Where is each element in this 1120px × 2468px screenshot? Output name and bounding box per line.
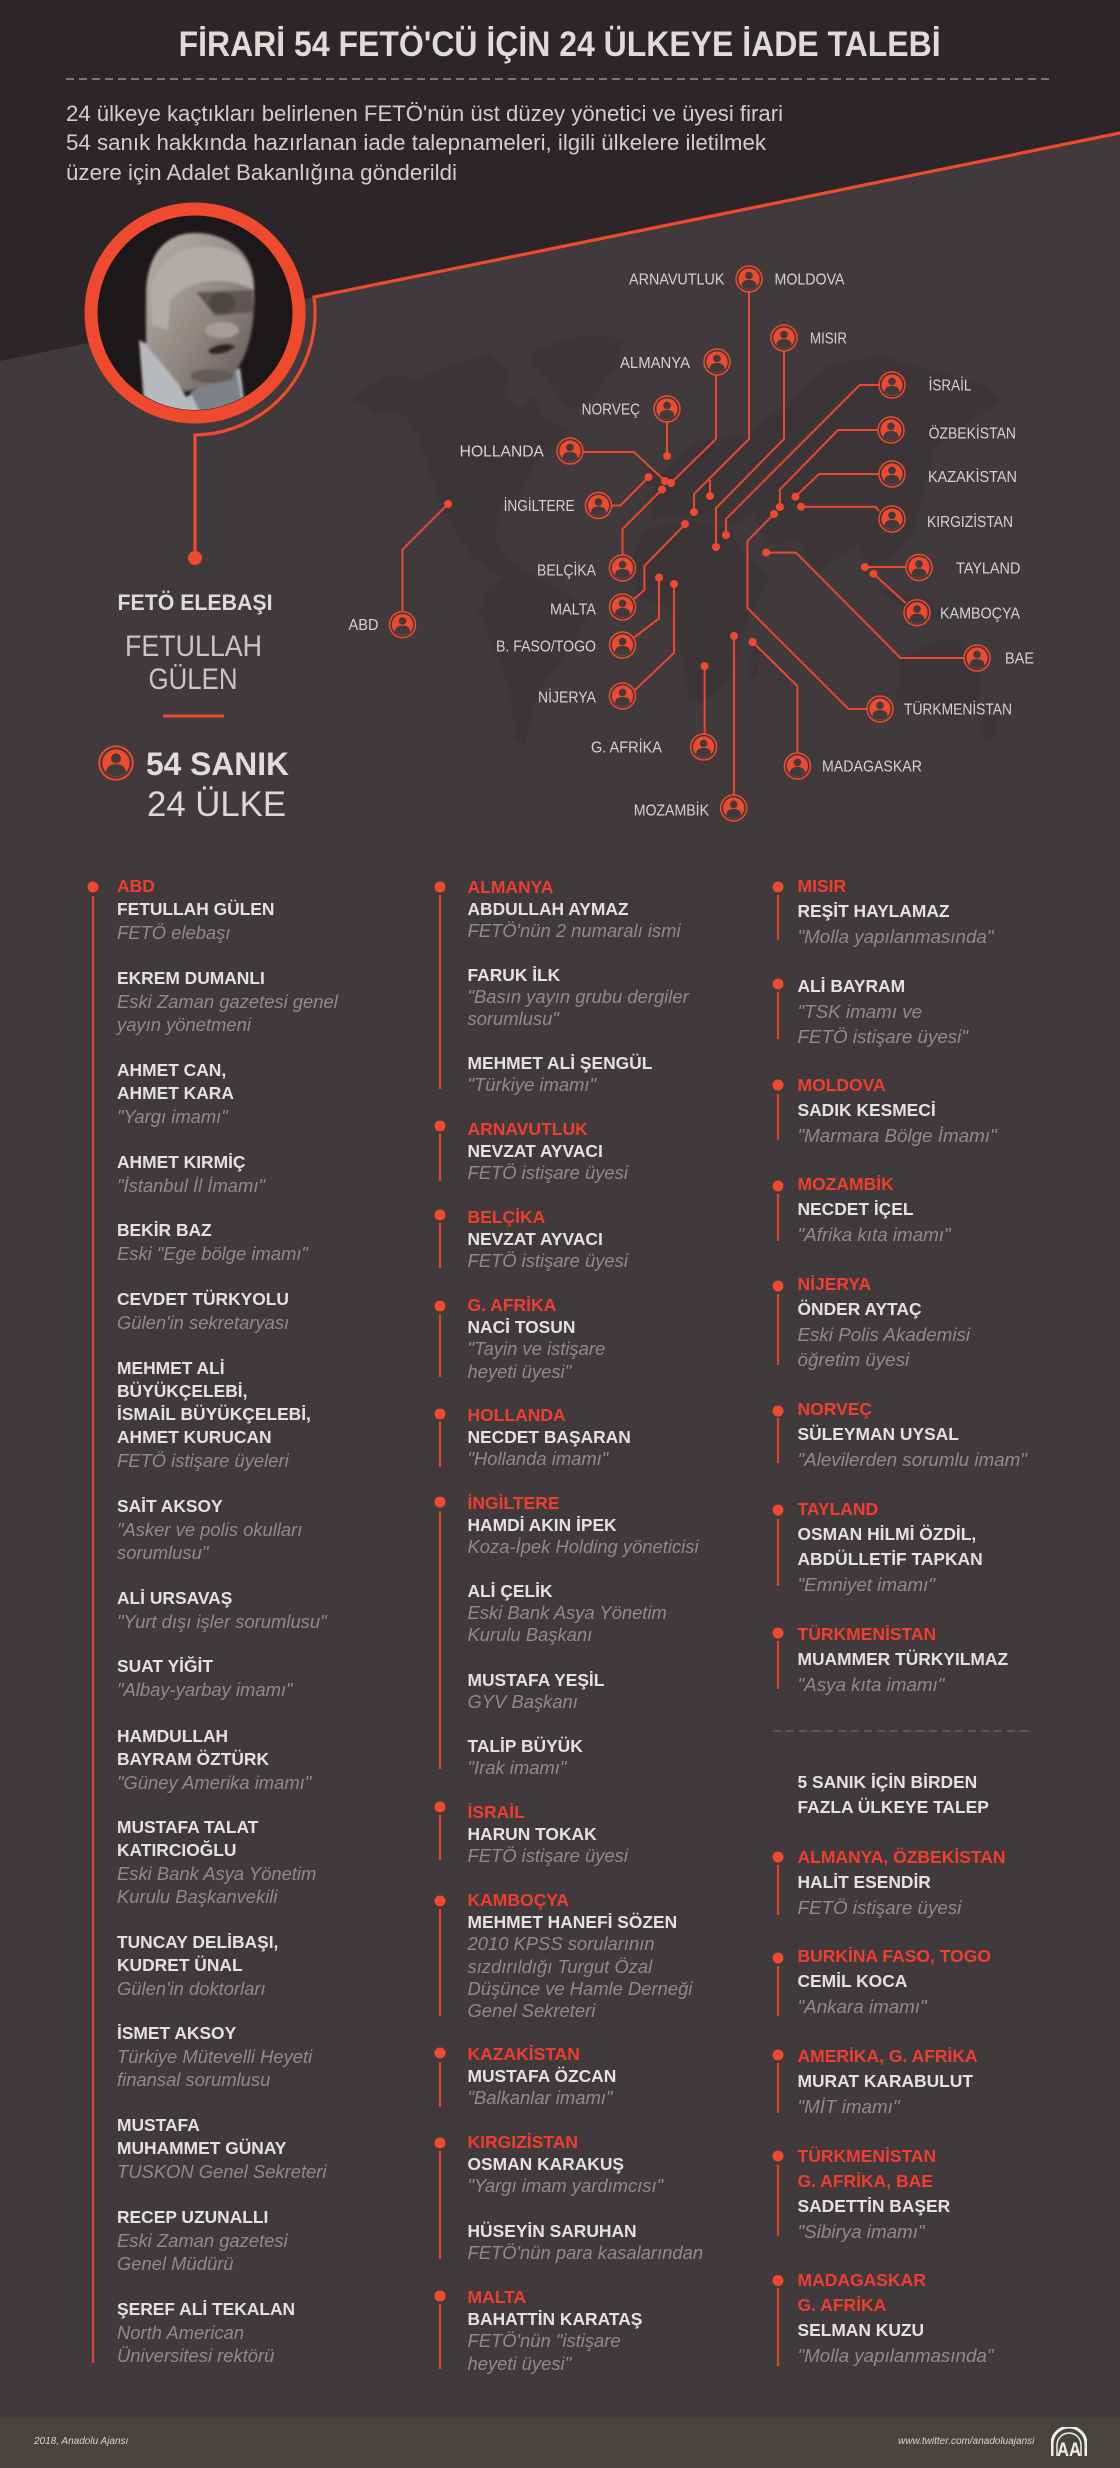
entry: Mehmet Ali Şengül: "Türkiye imamı"	[468, 1074, 596, 1095]
marker: Arnavutluk / Moldova	[629, 266, 845, 292]
entry: Recep Uzunallı	[117, 2206, 288, 2274]
footer bar	[0, 2418, 1120, 2468]
marker: Özbekistan: ÖZBEKİSTAN	[929, 424, 1016, 442]
text block: FETÖ leader: FETÖ ELEBAŞI	[118, 590, 272, 615]
entry: Türkmenistan, G. Afrika, BAE: TÜRKMENİSTAN	[798, 2146, 936, 2166]
entry: Madagaskar, G. Afrika	[798, 2268, 994, 2368]
entry: Mısır: MISIR	[798, 876, 846, 896]
entry: Nijerya: Eski Polis Akademisi	[798, 1324, 970, 1344]
entry: Türkmenistan, G. Afrika, BAE: "Sibirya imamı"	[798, 2220, 925, 2242]
entry: Kamboçya: Düşünce ve Hamle Derneği	[468, 1978, 692, 1999]
entry: Mehmet Ali Büyükçelebi and others: BÜYÜKÇELEBİ,	[117, 1380, 247, 1400]
entry: Burkina Faso, Togo: "Ankara imamı"	[798, 1996, 927, 2016]
entry: G. Afrika: "Tayin ve istişare	[468, 1338, 605, 1359]
marker: Mozambik	[634, 795, 747, 821]
entry: Hollanda	[468, 1405, 631, 1469]
entry: Almanya: FETÖ'nün 2 numaralı ismi	[468, 920, 681, 941]
entry: Faruk İlk: "Basın yayın grubu dergiler	[468, 986, 689, 1007]
entry: Almanya: ABDULLAH AYMAZ	[468, 899, 629, 919]
marker: Hollanda	[460, 438, 583, 464]
entry: Arnavutluk: ARNAVUTLUK	[468, 1119, 588, 1139]
entry: Recep Uzunallı: RECEP UZUNALLI	[117, 2206, 268, 2226]
entry: Tayland	[798, 1496, 983, 1596]
marker: B. Faso/Togo: B. FASO/TOGO	[496, 638, 596, 656]
marker: Malta	[550, 594, 636, 620]
entry: Mustafa Talat Katırcıoğlu: Kurulu Başkanvekili	[117, 1886, 278, 1906]
entry: Tuncay Delibaşı, Kudret Ünal: TUNCAY DELİBAŞI,	[117, 1932, 278, 1952]
entry: ABD: FETULLAH GÜLEN	[117, 899, 274, 919]
marker: BAE: BAE	[1005, 650, 1034, 668]
entry: Ali Bayram: "TSK imamı ve	[798, 1000, 922, 1022]
entry: Mustafa Yeşil	[468, 1670, 604, 1712]
entry: Sait Aksoy	[117, 1496, 302, 1562]
entry: Faruk İlk	[468, 965, 690, 1029]
marker: Almanya: ALMANYA	[620, 355, 691, 372]
entry: Norveç: "Alevilerden sorumlu imam"	[798, 1448, 1027, 1470]
heading: multi-country requests: FAZLA ÜLKEYE TALEP	[798, 1796, 989, 1816]
entry: Burkina Faso, Togo: BURKİNA FASO, TOGO	[798, 1946, 991, 1966]
entry: Mustafa Muhammet Günay: MUHAMMET GÜNAY	[117, 2138, 286, 2158]
entry: Ahmet Can, Ahmet Kara: "Yargı imamı"	[117, 1106, 228, 1126]
entry: Sait Aksoy: "Asker ve polis okulları	[117, 1518, 302, 1540]
entry: Kırgızistan: KIRGIZİSTAN	[468, 2132, 578, 2152]
panel: column 1 list	[116, 876, 338, 2366]
marker: Mısır	[771, 325, 847, 351]
entry: Şeref Ali Tekalan: ŞEREF ALİ TEKALAN	[117, 2298, 295, 2318]
entry: Ali Bayram: ALİ BAYRAM	[798, 976, 905, 996]
entry: Almanya, Özbekistan: HALİT ESENDİR	[798, 1872, 931, 1892]
entry: Amerika, G. Afrika: "MİT imamı"	[798, 2096, 900, 2116]
entry: G. Afrika: NACİ TOSUN	[468, 1317, 575, 1337]
entry: Kamboçya: Genel Sekreteri	[468, 2000, 595, 2021]
entry: Türkmenistan	[798, 1622, 1008, 1696]
entry: İsrail: FETÖ istişare üyesi	[468, 1845, 628, 1866]
entry: Recep Uzunallı: Genel Müdürü	[117, 2252, 234, 2274]
text block: FETÖ leader: FETULLAH	[125, 630, 262, 663]
portrait: Fetullah Gülen	[84, 202, 306, 424]
marker: Mozambik: MOZAMBİK	[634, 802, 710, 820]
entry: Mehmet Ali Büyükçelebi and others: AHMET KURUCAN	[117, 1426, 272, 1446]
panel: column 3 list	[798, 870, 1098, 2380]
entry: Suat Yiğit	[117, 1656, 294, 1700]
entry: Madagaskar, G. Afrika: MADAGASKAR	[798, 2270, 926, 2290]
entry: Şeref Ali Tekalan	[117, 2298, 295, 2366]
entry: Nijerya: ÖNDER AYTAÇ	[798, 1298, 922, 1318]
entry: Recep Uzunallı: Eski Zaman gazetesi	[117, 2230, 288, 2250]
marker: İsrail: İSRAİL	[929, 376, 972, 394]
entry: Türkmenistan, G. Afrika, BAE	[798, 2144, 950, 2244]
entry: Burkina Faso, Togo: CEMİL KOCA	[798, 1970, 907, 1990]
marker: Malta: MALTA	[550, 602, 597, 618]
entry: Malta: BAHATTİN KARATAŞ	[468, 2309, 642, 2329]
entry: Mustafa Yeşil: GYV Başkanı	[468, 1691, 578, 1712]
entry: Almanya	[468, 877, 681, 941]
entry: İsmet Aksoy	[117, 2023, 313, 2090]
marker: Tayland: TAYLAND	[956, 560, 1020, 578]
entry: Hollanda: "Hollanda imamı"	[468, 1448, 608, 1469]
entry: Tuncay Delibaşı, Kudret Ünal	[117, 1932, 278, 1998]
entry: Belçika: NEVZAT AYVACI	[468, 1229, 603, 1249]
entry: Arnavutluk: NEVZAT AYVACI	[468, 1141, 603, 1161]
entry: Mustafa Talat Katırcıoğlu: KATIRCIOĞLU	[117, 1840, 236, 1860]
entry: Amerika, G. Afrika	[798, 2044, 978, 2118]
entry: Ali Çelik: ALİ ÇELİK	[468, 1581, 553, 1601]
entry: Mehmet Ali Büyükçelebi and others: FETÖ istişare üyeleri	[117, 1450, 289, 1470]
entry: Tayland: TAYLAND	[798, 1498, 878, 1518]
entry: Belçika: FETÖ istişare üyesi	[468, 1250, 628, 1271]
entry: G. Afrika: G. AFRİKA	[468, 1295, 556, 1315]
entry: Tayland: ABDÜLLETİF TAPKAN	[798, 1548, 983, 1568]
entry: ABD	[117, 876, 274, 943]
entry: Hollanda: HOLLANDA	[468, 1405, 566, 1425]
entry: Kırgızistan: "Yargı imam yardımcısı"	[468, 2175, 663, 2196]
title: FİRARİ 54 FETÖ'CÜ İÇİN 24 ÜLKEYE İADE TALEBİ	[179, 25, 941, 64]
marker: Nijerya	[538, 683, 636, 709]
entry: Tuncay Delibaşı, Kudret Ünal: Gülen'in doktorları	[117, 1978, 266, 1998]
entry: İngiltere: Koza-İpek Holding yöneticisi	[468, 1536, 699, 1557]
marker: Norveç: NORVEÇ	[582, 402, 640, 418]
marker: Türkmenistan	[867, 696, 1012, 722]
entry: Norveç	[798, 1396, 1027, 1472]
entry: İsrail: HARUN TOKAK	[468, 1824, 597, 1844]
entry: Belçika: BELÇİKA	[468, 1207, 545, 1227]
marker: G. Afrika	[591, 734, 717, 760]
entry: Malta	[468, 2286, 642, 2375]
entry: Türkmenistan, G. Afrika, BAE: SADETTİN BAŞER	[798, 2196, 950, 2216]
entry: Sait Aksoy: SAİT AKSOY	[117, 1496, 223, 1516]
entry: İsrail: İSRAİL	[468, 1802, 525, 1822]
entry: Arnavutluk: FETÖ istişare üyesi	[468, 1162, 628, 1183]
entry: Tuncay Delibaşı, Kudret Ünal: KUDRET ÜNAL	[117, 1954, 243, 1974]
footer link: www.twitter.com/anadoluajansi	[898, 2436, 1034, 2447]
heading: multi-country requests	[798, 1770, 989, 1820]
entry: Nijerya: öğretim üyesi	[798, 1348, 909, 1370]
entry: Cevdet Türkyolu: CEVDET TÜRKYOLU	[117, 1288, 289, 1308]
entry: Sait Aksoy: sorumlusu"	[117, 1542, 208, 1562]
marker: Arnavutluk / Moldova: ARNAVUTLUK	[629, 272, 725, 288]
entry: Ali Çelik	[468, 1581, 667, 1645]
entry: Hüseyin Saruhan: FETÖ'nün para kasalarından	[468, 2242, 703, 2263]
entry: Mozambik	[798, 1172, 951, 1246]
entry: Madagaskar, G. Afrika: G. AFRİKA	[798, 2294, 886, 2314]
entry: ABD: ABD	[117, 876, 155, 896]
entry: İngiltere: İNGİLTERE	[468, 1493, 560, 1513]
entry: Talip Büyük: "Irak imamı"	[468, 1757, 566, 1778]
entry: Mısır: REŞİT HAYLAMAZ	[798, 900, 950, 920]
entry: İsmet Aksoy: Türkiye Mütevelli Heyeti	[117, 2046, 312, 2067]
entry: Mısır: "Molla yapılanmasında"	[798, 926, 994, 946]
entry: G. Afrika	[468, 1295, 605, 1382]
entry: Talip Büyük: TALİP BÜYÜK	[468, 1736, 583, 1756]
entry: Türkmenistan: TÜRKMENİSTAN	[798, 1624, 936, 1644]
entry: Ekrem Dumanlı: Eski Zaman gazetesi genel	[117, 990, 338, 1012]
entry: Cevdet Türkyolu	[117, 1288, 289, 1333]
marker: G. Afrika: G. AFRİKA	[591, 738, 663, 756]
entry: Türkmenistan: MUAMMER TÜRKYILMAZ	[798, 1648, 1008, 1668]
entry: Ali Çelik: Kurulu Başkanı	[468, 1624, 592, 1645]
marker: Kazakistan	[879, 461, 1017, 487]
entry: Ali Bayram	[798, 974, 968, 1048]
entry: Ekrem Dumanlı: yayın yönetmeni	[117, 1014, 251, 1034]
entry: Almanya, Özbekistan: ALMANYA, ÖZBEKİSTAN	[798, 1846, 1006, 1866]
entry: Ali Bayram: FETÖ istişare üyesi"	[798, 1026, 968, 1046]
entry: Faruk İlk: sorumlusu"	[468, 1008, 559, 1029]
entry: Ahmet Can, Ahmet Kara: AHMET KARA	[117, 1082, 234, 1102]
entry: Norveç: NORVEÇ	[798, 1398, 872, 1418]
entry: Moldova: SADIK KESMECİ	[798, 1100, 936, 1120]
entry: Bekir Baz: BEKİR BAZ	[117, 1220, 212, 1240]
entry: Malta: MALTA	[468, 2287, 526, 2307]
entry: Kamboçya	[467, 1890, 693, 2021]
entry: Almanya, Özbekistan	[798, 1844, 1006, 1920]
intro paragraph: 54 sanık hakkında hazırlanan iade talepnameleri, ilgili ülkelere iletilmek	[66, 130, 767, 155]
entry: Malta: heyeti üyesi"	[468, 2352, 571, 2374]
entry: Ali Ursavaş: "Yurt dışı işler sorumlusu"	[117, 1610, 327, 1632]
entry: Ali Ursavaş	[117, 1588, 328, 1632]
marker: Madagaskar	[784, 753, 922, 779]
entry: Ahmet Can, Ahmet Kara	[117, 1060, 234, 1127]
entry: Hollanda: NECDET BAŞARAN	[468, 1427, 631, 1447]
entry: Tayland: OSMAN HİLMİ ÖZDİL,	[798, 1524, 976, 1544]
marker: Özbekistan	[878, 417, 1016, 443]
panel: column 2 list	[467, 877, 703, 2374]
entry: Mozambik: NECDET İÇEL	[798, 1198, 913, 1218]
entry: Şeref Ali Tekalan: Üniversitesi rektörü	[117, 2344, 274, 2366]
entry: Nijerya: NİJERYA	[798, 1274, 871, 1294]
marker: İngiltere	[504, 492, 612, 518]
entry: Ahmet Kırmiç: "İstanbul İl İmamı"	[117, 1174, 265, 1196]
entry: Cevdet Türkyolu: Gülen'in sekretaryası	[117, 1312, 289, 1332]
entry: Tayland: "Emniyet imamı"	[798, 1574, 935, 1594]
entry: Mustafa Muhammet Günay: MUSTAFA	[117, 2114, 200, 2134]
marker: İngiltere: İNGİLTERE	[504, 497, 575, 515]
entry: Ahmet Kırmiç: AHMET KIRMİÇ	[117, 1152, 246, 1172]
entry: Nijerya	[798, 1272, 970, 1372]
entry: Mustafa Yeşil: MUSTAFA YEŞİL	[468, 1670, 604, 1690]
entry: Faruk İlk: FARUK İLK	[468, 965, 560, 985]
entry: Kamboçya: KAMBOÇYA	[468, 1890, 569, 1910]
marker: İsrail	[879, 372, 972, 398]
marker: B. Faso/Togo	[496, 632, 636, 658]
entry: Mustafa Muhammet Günay	[117, 2114, 327, 2182]
heading: multi-country requests: 5 SANIK İÇİN BİRDEN	[798, 1772, 977, 1792]
marker: ABD	[348, 612, 416, 638]
entry: Ekrem Dumanlı: EKREM DUMANLI	[117, 968, 265, 988]
entry: Kamboçya: 2010 KPSS sorularının	[468, 1933, 655, 1954]
icon: world map silhouette	[0, 0, 1120, 800]
entry: Mustafa Talat Katırcıoğlu: MUSTAFA TALAT	[117, 1816, 258, 1836]
marker: BAE	[964, 645, 1034, 671]
entry: Kırgızistan	[468, 2131, 663, 2198]
entry: Mehmet Ali Şengül: MEHMET ALİ ŞENGÜL	[468, 1053, 652, 1073]
entry: Kazakistan: KAZAKİSTAN	[468, 2044, 580, 2064]
entry: Kamboçya: sızdırıldığı Turgut Özal	[468, 1956, 652, 1976]
marker: Tayland	[906, 554, 1020, 580]
entry: Kazakistan: MUSTAFA ÖZCAN	[468, 2066, 616, 2086]
entry: Kazakistan	[468, 2044, 616, 2108]
entry: Belçika	[468, 1207, 628, 1271]
marker: Hollanda: HOLLANDA	[460, 444, 545, 460]
marker: Belçika	[537, 555, 636, 581]
entry: Mehmet Ali Büyükçelebi and others: İSMAİL BÜYÜKÇELEBİ,	[117, 1404, 311, 1424]
entry: Mozambik: MOZAMBİK	[798, 1174, 894, 1194]
entry: ABD: FETÖ elebaşı	[117, 922, 230, 943]
entry: İsmet Aksoy: finansal sorumlusu	[117, 2069, 270, 2090]
entry: İsrail	[468, 1802, 628, 1866]
entry: Almanya, Özbekistan: FETÖ istişare üyesi	[798, 1896, 961, 1918]
marker: Kamboçya: KAMBOÇYA	[940, 606, 1021, 622]
marker: Kamboçya	[904, 600, 1021, 626]
marker: Belçika: BELÇİKA	[537, 562, 597, 580]
entry: Bekir Baz: Eski "Ege bölge imamı"	[117, 1242, 308, 1264]
entry: Hüseyin Saruhan	[468, 2220, 703, 2264]
marker: Türkmenistan: TÜRKMENİSTAN	[904, 700, 1012, 718]
entry: Hamdullah Bayram Öztürk: BAYRAM ÖZTÜRK	[117, 1748, 269, 1768]
entry: Madagaskar, G. Afrika: SELMAN KUZU	[798, 2320, 924, 2340]
entry: Kazakistan: "Balkanlar imamı"	[468, 2087, 612, 2108]
icon: Anadolu Agency logo	[1051, 2427, 1087, 2457]
footer credit: 2018, Anadolu Ajansı	[34, 2436, 128, 2447]
marker: Mısır: MISIR	[810, 330, 847, 348]
marker: Norveç	[582, 396, 680, 422]
entry: Almanya: ALMANYA	[468, 877, 553, 897]
entry: İsmet Aksoy: İSMET AKSOY	[117, 2023, 236, 2043]
entry: Suat Yiğit: "Albay-yarbay imamı"	[117, 1678, 293, 1700]
entry: Malta: FETÖ'nün "istişare	[468, 2330, 621, 2351]
entry: Mustafa Talat Katırcıoğlu: Eski Bank Asya Yönetim	[117, 1862, 316, 1884]
intro paragraph: üzere için Adalet Bakanlığına gönderildi	[66, 160, 457, 185]
entry: Madagaskar, G. Afrika: "Molla yapılanmasında"	[798, 2344, 994, 2366]
entry: Kırgızistan: OSMAN KARAKUŞ	[468, 2154, 624, 2174]
entry: Burkina Faso, Togo	[798, 1944, 991, 2018]
entry: Ali Ursavaş: ALİ URSAVAŞ	[117, 1588, 232, 1608]
entry: Mısır	[798, 874, 994, 948]
entry: Mozambik: "Afrika kıta imamı"	[798, 1224, 951, 1244]
entry: Hüseyin Saruhan: HÜSEYİN SARUHAN	[468, 2221, 637, 2241]
text block: 54 sanık 24 ülke	[98, 745, 289, 824]
entry: Moldova: MOLDOVA	[798, 1074, 886, 1094]
entry: Hamdullah Bayram Öztürk	[117, 1726, 312, 1793]
entry: Arnavutluk	[468, 1119, 628, 1183]
entry: Ahmet Can, Ahmet Kara: AHMET CAN,	[117, 1060, 226, 1080]
entry: Kamboçya: MEHMET HANEFİ SÖZEN	[468, 1912, 677, 1932]
entry: Norveç: SÜLEYMAN UYSAL	[798, 1424, 959, 1444]
entry: Ahmet Kırmiç	[117, 1152, 266, 1196]
entry: Şeref Ali Tekalan: North American	[117, 2322, 244, 2342]
entry: Suat Yiğit: SUAT YİĞİT	[117, 1656, 213, 1676]
marker: Nijerya: NİJERYA	[538, 688, 597, 706]
entry: Bekir Baz	[117, 1220, 308, 1264]
entry: Türkmenistan: "Asya kıta imamı"	[798, 1674, 944, 1694]
intro paragraph	[66, 101, 783, 185]
entry: Ekrem Dumanlı	[116, 968, 338, 1035]
entry: Mehmet Ali Büyükçelebi and others: MEHMET ALİ	[117, 1358, 225, 1378]
entry: Türkmenistan, G. Afrika, BAE: G. AFRİKA, BAE	[798, 2170, 933, 2190]
accent line framing the portrait	[188, 131, 1120, 565]
marker: Madagaskar: MADAGASKAR	[822, 758, 922, 776]
entry: Mustafa Talat Katırcıoğlu	[117, 1816, 316, 1907]
entry: Amerika, G. Afrika: MURAT KARABULUT	[798, 2070, 973, 2090]
marker: Arnavutluk / Moldova: MOLDOVA	[774, 272, 845, 288]
marker: Almanya	[620, 349, 730, 375]
entry: Mustafa Muhammet Günay: TUSKON Genel Sekreteri	[117, 2160, 327, 2182]
text block: 54 sanık 24 ülke: 24 ÜLKE	[147, 785, 286, 824]
entry: Ali Çelik: Eski Bank Asya Yönetim	[468, 1602, 667, 1623]
intro paragraph: 24 ülkeye kaçtıkları belirlenen FETÖ'nün üst düzey yönetici ve üyesi firari	[66, 101, 783, 126]
entry: Moldova	[798, 1072, 997, 1148]
entry: Amerika, G. Afrika: AMERİKA, G. AFRİKA	[798, 2046, 978, 2066]
entry: İngiltere: HAMDİ AKIN İPEK	[468, 1515, 617, 1535]
text block: 54 sanık 24 ülke: 54 SANIK	[146, 746, 289, 782]
marker: Kırgızistan: KIRGIZİSTAN	[927, 513, 1013, 531]
entry: Mehmet Ali Şengül	[468, 1053, 652, 1095]
marker: Kazakistan: KAZAKİSTAN	[928, 468, 1017, 486]
entry: Hamdullah Bayram Öztürk: HAMDULLAH	[117, 1726, 228, 1746]
entry: Talip Büyük	[468, 1736, 583, 1778]
text block: FETÖ leader	[118, 590, 272, 695]
entry: Hamdullah Bayram Öztürk: "Güney Amerika imamı"	[117, 1772, 311, 1792]
map connectors and country markers	[348, 265, 1034, 822]
marker: Kırgızistan	[879, 506, 1013, 532]
entry: G. Afrika: heyeti üyesi"	[468, 1360, 571, 1382]
marker: ABD: ABD	[348, 617, 378, 634]
entry: Moldova: "Marmara Bölge İmamı"	[798, 1124, 997, 1146]
entry: Mehmet Ali Büyükçelebi and others	[117, 1358, 311, 1471]
entry: İngiltere	[468, 1493, 699, 1557]
